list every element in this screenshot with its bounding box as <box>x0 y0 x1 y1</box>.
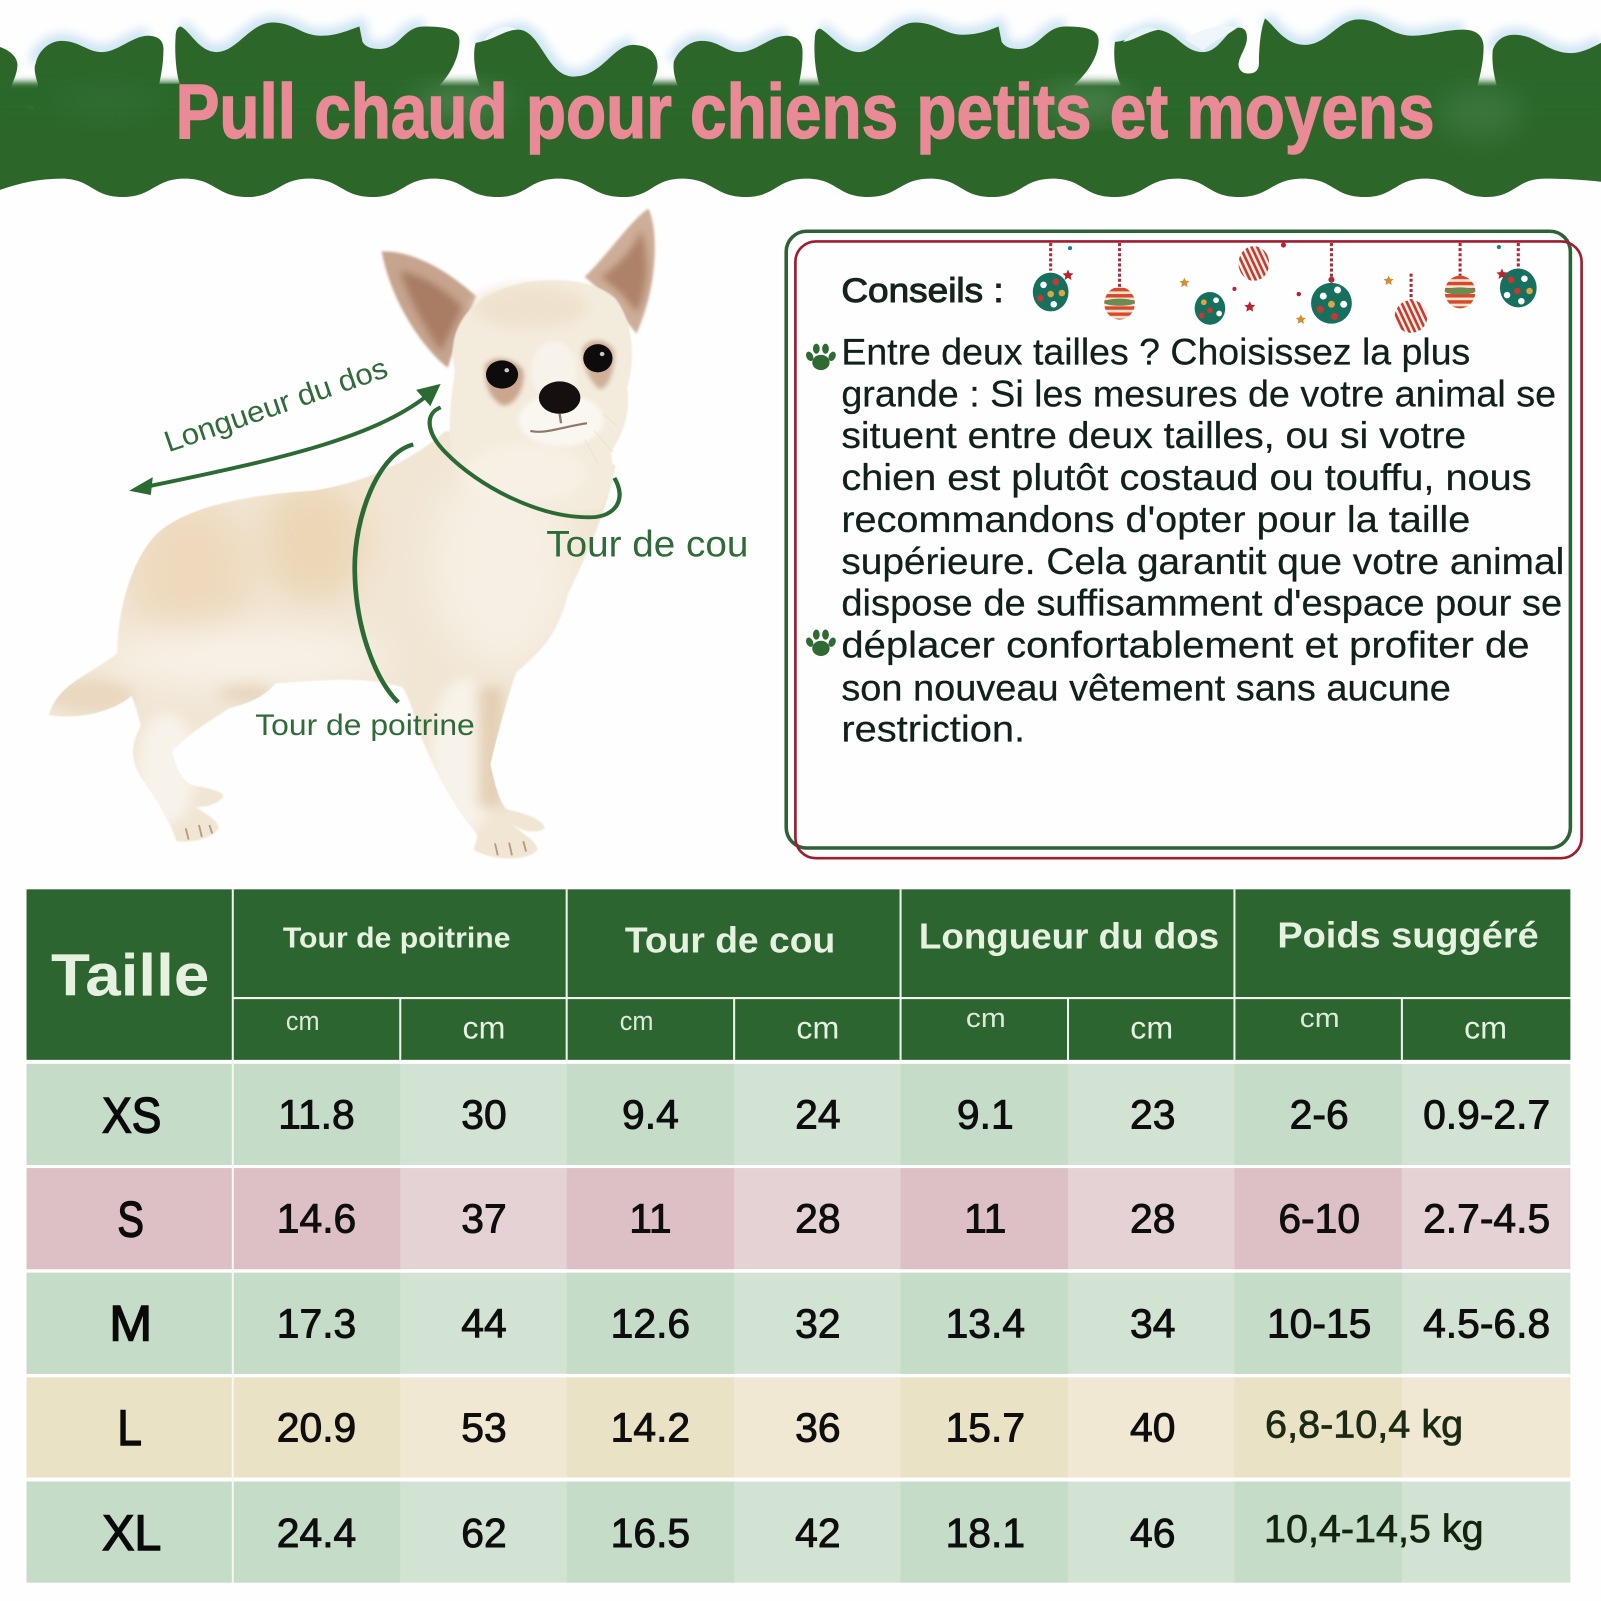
ornaments <box>1033 242 1537 333</box>
advice text: Entre deux tailles ? Choisissez la plus <box>841 332 1470 373</box>
table header: cm <box>1300 1003 1340 1033</box>
advice text: déplacer confortablement et profiter de <box>841 625 1530 666</box>
advice text: grande : Si les mesures de votre animal se <box>841 373 1556 414</box>
icon: paw 2 <box>805 629 837 656</box>
table header: Tour de poitrine <box>283 923 511 955</box>
row L <box>27 1377 1570 1477</box>
row M: 34 <box>1130 1301 1175 1347</box>
row XL: XL <box>102 1505 161 1561</box>
row S: 28 <box>795 1195 841 1241</box>
table header: cm <box>286 1006 320 1036</box>
row M: 10-15 <box>1267 1301 1371 1347</box>
row M: 44 <box>461 1301 507 1347</box>
heading: advice: Conseils : <box>841 272 1004 310</box>
row L: 6,8-10,4 kg <box>1265 1404 1463 1447</box>
row S: 14.6 <box>277 1195 356 1241</box>
row XS <box>27 1064 1570 1165</box>
row S <box>27 1168 1570 1269</box>
row M: 4.5-6.8 <box>1423 1301 1550 1347</box>
row XS: 24 <box>795 1091 841 1137</box>
row XS: 2-6 <box>1290 1091 1349 1137</box>
paw toes <box>186 825 526 855</box>
row M <box>27 1273 1570 1374</box>
row XS: 30 <box>461 1091 507 1137</box>
eyes <box>486 360 518 389</box>
row XL: 10,4-14,5 kg <box>1264 1508 1484 1551</box>
icon: paw 1 <box>805 344 837 370</box>
head <box>450 280 632 511</box>
table header: cm <box>1130 1009 1173 1045</box>
back length arrow <box>129 384 441 495</box>
row XL: 46 <box>1130 1510 1175 1556</box>
table header: Taille <box>51 942 209 1009</box>
row XL: 24.4 <box>277 1510 356 1556</box>
table header: cm <box>1464 1009 1507 1045</box>
neck guide curve <box>430 407 620 517</box>
right ear <box>585 209 655 333</box>
row S: 11 <box>629 1195 672 1241</box>
table header: cm <box>966 1003 1006 1033</box>
title: Pull chaud pour chiens petits et moyens <box>176 70 1435 155</box>
row L: 53 <box>461 1405 507 1451</box>
row L: 14.2 <box>611 1405 690 1451</box>
dog photo with measurement guides <box>49 209 748 859</box>
header banner <box>0 18 1601 197</box>
row M: 17.3 <box>277 1301 356 1347</box>
row S: S <box>117 1191 144 1247</box>
size table <box>27 889 1570 1583</box>
row XS: 0.9-2.7 <box>1423 1091 1550 1137</box>
face markings <box>485 359 524 405</box>
label: chest: Tour de poitrine <box>255 709 475 742</box>
row L: 20.9 <box>277 1405 356 1451</box>
advice text: restriction. <box>841 708 1025 749</box>
panel: advice <box>786 231 1582 858</box>
advice text: dispose de suffisamment d'espace pour se <box>841 583 1562 624</box>
table header <box>27 889 1570 1064</box>
row S: 2.7-4.5 <box>1423 1195 1550 1241</box>
row M: 32 <box>795 1301 841 1347</box>
row XL: 42 <box>795 1510 841 1556</box>
table header: cm <box>620 1006 653 1036</box>
row XS: 9.1 <box>957 1091 1014 1137</box>
chest guide curve <box>355 445 413 702</box>
table header: Longueur du dos <box>919 917 1219 957</box>
row M: M <box>109 1296 152 1352</box>
label: neck: Tour de cou <box>546 523 748 564</box>
row XL: 18.1 <box>946 1510 1025 1556</box>
table header: Tour de cou <box>625 921 835 961</box>
row L: 40 <box>1130 1405 1175 1451</box>
advice text: situent entre deux tailles, ou si votre <box>841 415 1466 456</box>
left ear <box>382 251 476 368</box>
advice text: supérieure. Cela garantit que votre animal <box>841 541 1564 582</box>
advice text: son nouveau vêtement sans aucune <box>841 667 1451 708</box>
advice text <box>841 332 1564 749</box>
advice text: chien est plutôt costaud ou touffu, nous <box>841 457 1532 498</box>
row S: 11 <box>964 1195 1007 1241</box>
dog illustration <box>49 209 655 859</box>
row M: 13.4 <box>946 1301 1025 1347</box>
row L: 36 <box>795 1405 841 1451</box>
row L: 15.7 <box>946 1405 1025 1451</box>
row XS: XS <box>102 1087 161 1143</box>
table header: Poids suggéré <box>1277 916 1539 956</box>
row S: 28 <box>1130 1195 1175 1241</box>
table header: cm <box>796 1009 839 1045</box>
advice text: recommandons d'opter pour la taille <box>841 499 1470 540</box>
row XL: 62 <box>461 1510 507 1556</box>
row S: 37 <box>461 1195 507 1241</box>
row XL: 16.5 <box>611 1510 690 1556</box>
row XS: 11.8 <box>278 1091 355 1137</box>
row XS: 23 <box>1130 1091 1175 1137</box>
row XS: 9.4 <box>622 1091 679 1137</box>
label: back length: Longueur du dos <box>160 352 392 459</box>
row S: 6-10 <box>1278 1195 1360 1241</box>
nose and mouth <box>539 381 580 414</box>
row L: L <box>117 1400 142 1456</box>
row XL <box>27 1482 1570 1583</box>
table header: cm <box>463 1009 505 1045</box>
row M: 12.6 <box>611 1301 690 1347</box>
